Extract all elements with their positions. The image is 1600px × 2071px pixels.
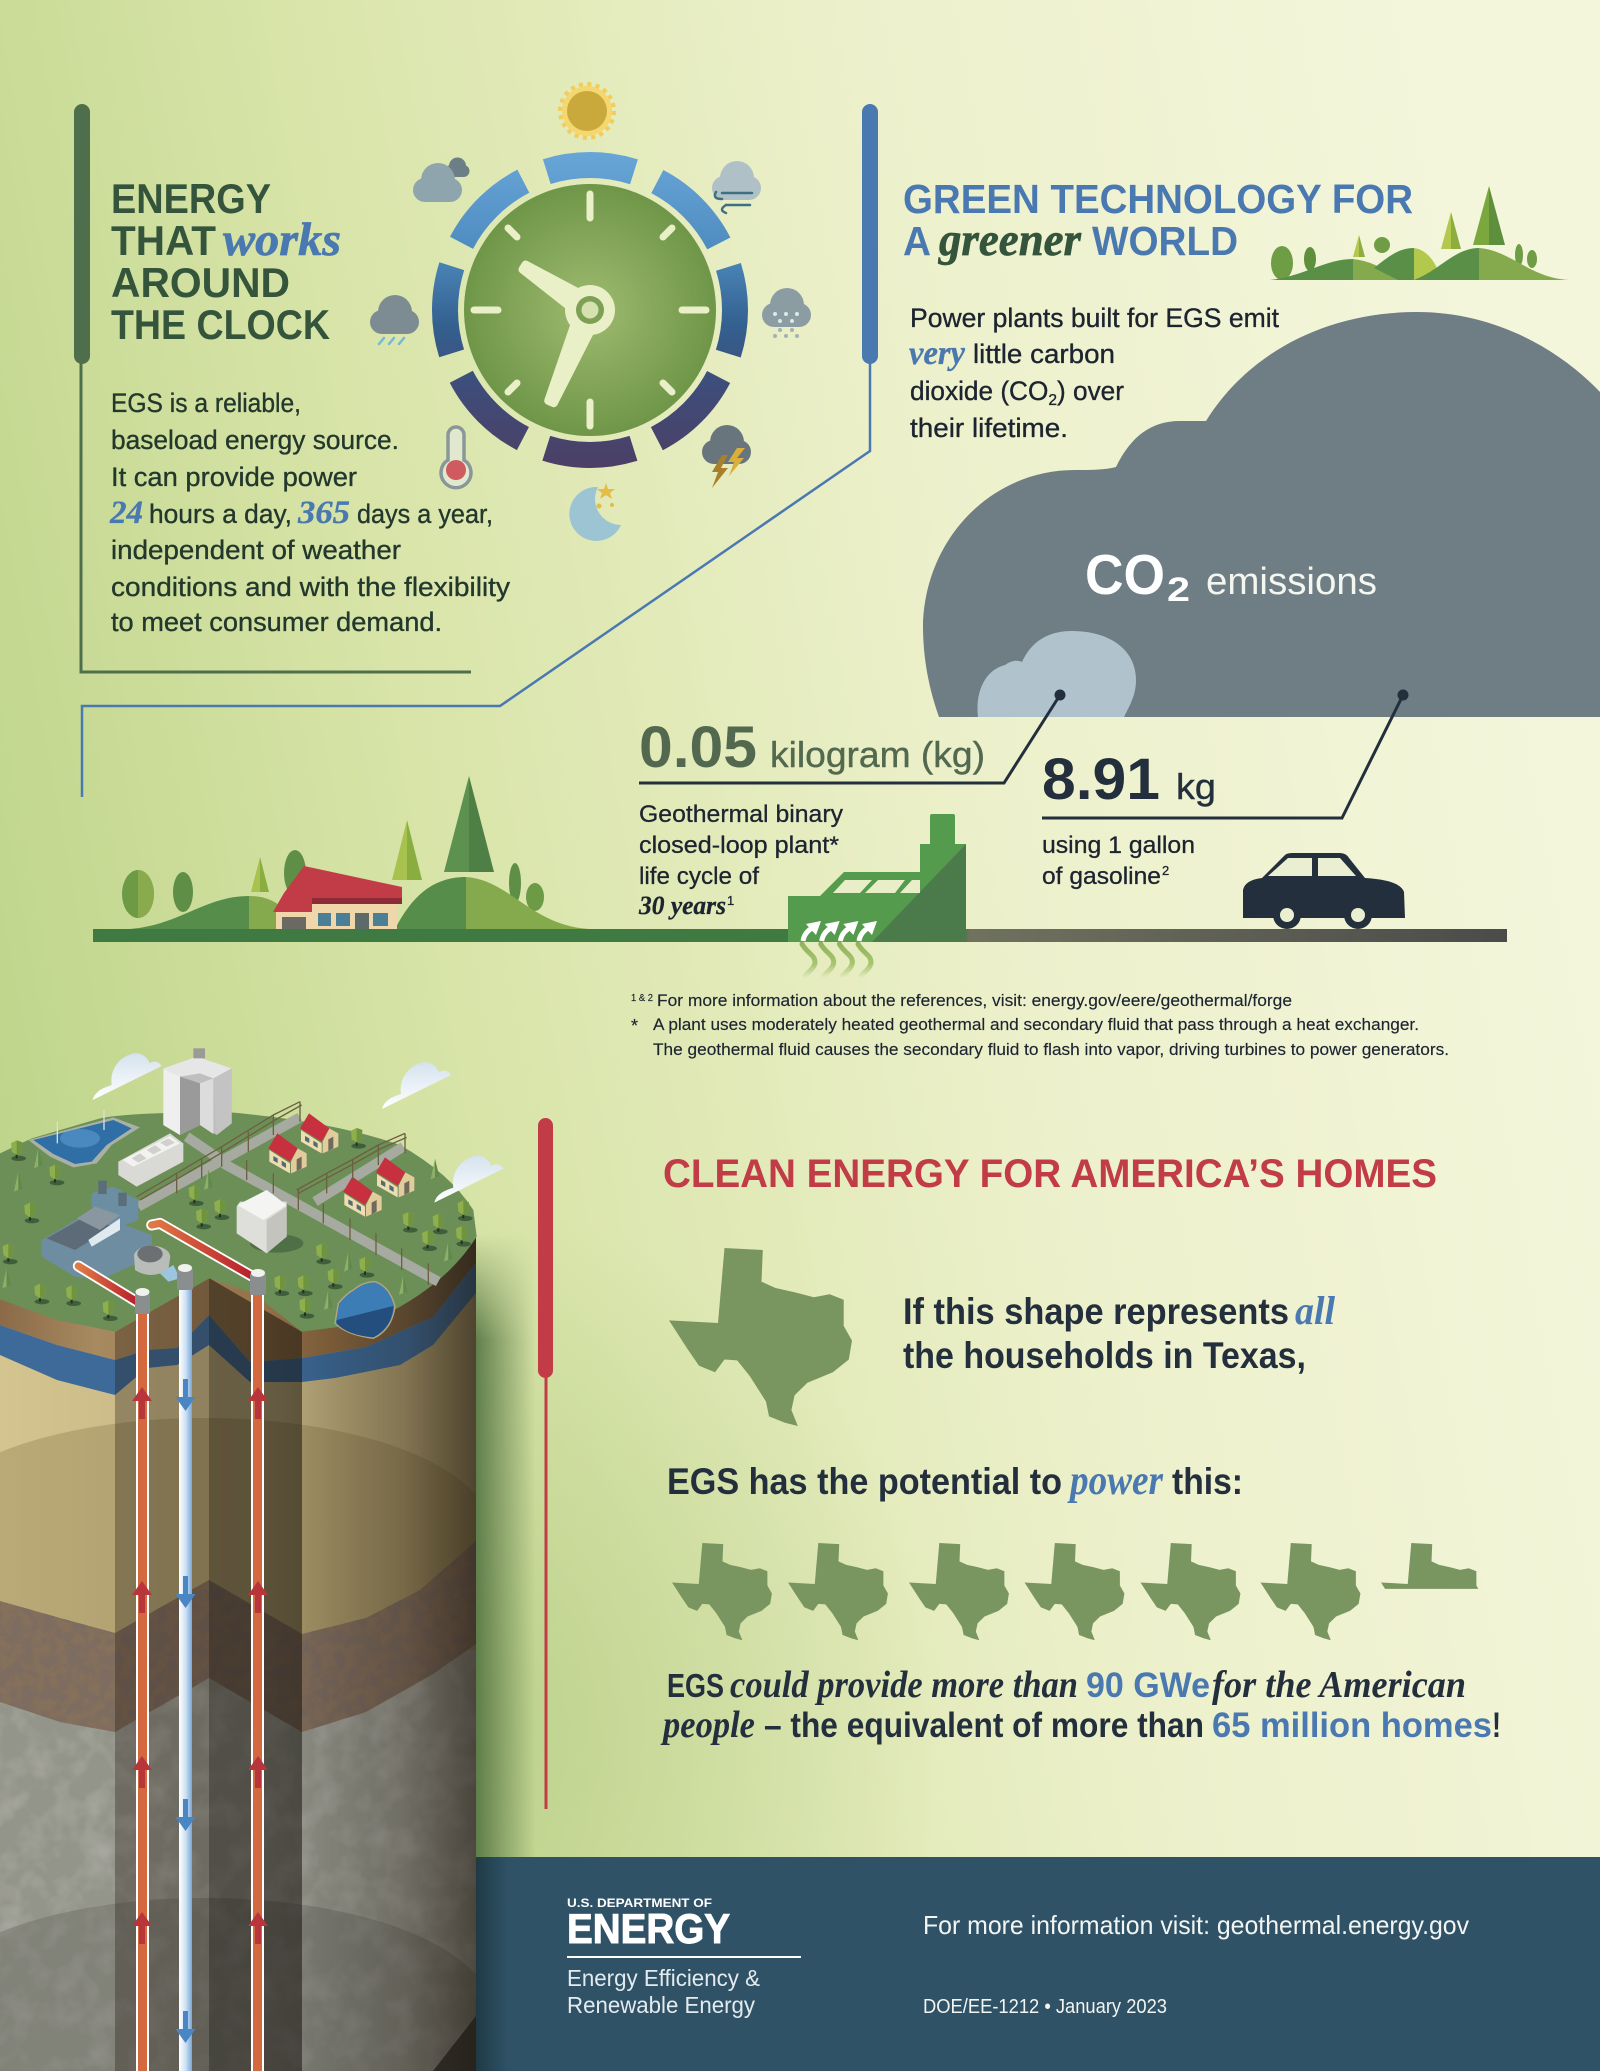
icon: moon and stars [569, 483, 621, 541]
callout: 0.05 kilogram: closed-loop plant* [639, 832, 839, 859]
footnotes: A plant uses moderately heated geothermal and secondary fluid that pass through a heat exchanger. [653, 1015, 1419, 1034]
heading: green technology: WORLD [1092, 218, 1238, 264]
panel: clean energy for America's homes [538, 1118, 1501, 1809]
roads [138, 1117, 438, 1282]
callout: 0.05 kilogram: Geothermal binary [639, 801, 843, 828]
icon: Texas large [669, 1248, 852, 1426]
text: 90 GWe and 65 million homes: 65 million homes [1212, 1706, 1492, 1745]
body text: very little carbon dioxide [909, 303, 1279, 443]
logo: U.S. Department of Energy: Energy Efficiency & [567, 1965, 760, 1991]
icon: heat arrows [802, 921, 877, 976]
sky clouds [93, 1053, 503, 1203]
body text: reliable baseload: to meet consumer demand. [111, 607, 442, 637]
footer [476, 1857, 1600, 2071]
callout: 8.91 kg [1042, 690, 1408, 890]
power lines [137, 1102, 428, 1285]
panel: green technology for a greener world [82, 104, 1600, 920]
icon: office tower [163, 1048, 232, 1135]
chart: CO2 emissions large cloud: emissions [1206, 561, 1377, 603]
heading: energy that works around the clock: works [223, 214, 341, 266]
text: EGS has the potential to power this: this: [1172, 1461, 1243, 1502]
chart: CO2 emissions large cloud [923, 312, 1600, 717]
trees [2, 1128, 473, 1321]
text: if this shape represents all: the households in Texas, [903, 1335, 1306, 1376]
heading: energy that works around the clock: THAT [111, 217, 216, 264]
body text: very little carbon dioxide: ) over [1057, 376, 1124, 406]
callout: 8.91 kg: using 1 gallon [1042, 832, 1195, 859]
callout: 8.91 kg: 2 [1162, 863, 1169, 878]
body text: reliable baseload: EGS is a reliable, [111, 388, 301, 418]
houses [268, 1113, 414, 1217]
icon: partly cloudy [413, 158, 470, 202]
logo: U.S. Department of Energy: U.S. DEPARTMENT OF [567, 1898, 712, 1910]
subsurface rock layers [0, 1237, 490, 2071]
body text: reliable baseload: It can provide power [111, 462, 357, 492]
heading: energy that works around the clock: THE CLOCK [111, 301, 330, 348]
body text: very little carbon dioxide: Power plants built for EGS emit [910, 303, 1279, 333]
callout: 8.91 kg: kg [1176, 766, 1216, 807]
text: EGS has the potential to power this [667, 1458, 1243, 1504]
heading: green technology: GREEN TECHNOLOGY FOR [903, 176, 1413, 222]
icon: separator tank [134, 1246, 180, 1282]
text: 90 GWe and 65 million homes: could provide more than [730, 1664, 1078, 1706]
icon: lower pond [335, 1282, 395, 1338]
icon: pond with wind turbines [28, 1110, 140, 1167]
text: if this shape represents all [903, 1288, 1336, 1376]
text: 90 GWe and 65 million homes: people [660, 1704, 755, 1746]
text: EGS has the potential to power this: power [1067, 1458, 1164, 1504]
callout: 8.91 kg: of gasoline [1042, 863, 1161, 890]
panel: energy that works around the clock [74, 85, 811, 672]
text: 90 GWe and 65 million homes [660, 1664, 1501, 1746]
body text: very little carbon dioxide: 2 [1048, 392, 1057, 409]
heading: energy that works around the clock: AROUND [111, 259, 290, 306]
illustration: landscape with house, plant and car [93, 776, 1507, 976]
icon: sun [561, 85, 613, 137]
text: 90 GWe and 65 million homes: EGS [667, 1667, 724, 1704]
cylinder drop shadow [476, 1235, 536, 1857]
body text: reliable baseload [109, 388, 511, 637]
hot pipes on surface [78, 1223, 252, 1302]
surface: grass, buildings, roads [0, 1048, 477, 1338]
grass disk [0, 1113, 477, 1332]
body text: very little carbon dioxide: their lifetime. [910, 413, 1068, 443]
red panel bar [538, 1118, 553, 1809]
body text: reliable baseload: hours a day, [149, 499, 292, 529]
callout: 0.05 kilogram: 0.05 [639, 715, 757, 780]
ground line [93, 929, 1507, 942]
callout: 0.05 kilogram [638, 690, 1066, 920]
icon: windy cloud [712, 161, 761, 213]
chart: CO2 emissions large cloud: CO [1085, 543, 1165, 607]
text: EGS has the potential to power this: EGS has the potential to [667, 1461, 1062, 1502]
text: 90 GWe and 65 million homes: – the equivalent of more than [764, 1706, 1204, 1745]
icon: storm cloud [702, 425, 751, 488]
callout: 8.91 kg: 8.91 [1042, 747, 1160, 812]
icon: left hills [130, 877, 589, 929]
body text: reliable baseload: 365 [297, 495, 350, 531]
blue panel bar and connector line [82, 104, 878, 797]
body text: very little carbon dioxide: very [909, 335, 966, 372]
icon: white block building [237, 1190, 303, 1253]
logo: U.S. Department of Energy: ENERGY [567, 1905, 730, 1952]
text: 90 GWe and 65 million homes: ! [1492, 1706, 1501, 1745]
icon: hills and trees [1270, 186, 1569, 280]
footnotes: The geothermal fluid causes the secondary fluid to flash into vapor, driving turbines to power generators. [653, 1040, 1449, 1059]
icon: snow cloud [762, 288, 811, 338]
heading: energy that works around the clock: ENERGY [111, 175, 271, 222]
icon: power plant [788, 814, 966, 942]
body text: reliable baseload: conditions and with the flexibility [111, 572, 511, 602]
icon: low white building [118, 1133, 183, 1187]
heading: energy that works around the clock [111, 175, 341, 348]
heading: green technology: greener [938, 214, 1082, 266]
illustration: EGS geothermal cutaway [0, 1048, 536, 2071]
body text: very little carbon dioxide: little carbon [973, 339, 1115, 369]
body text: reliable baseload: days a year, [357, 499, 493, 529]
body text: reliable baseload: baseload energy source. [111, 425, 399, 455]
heading: green technology: A [903, 218, 931, 264]
logo: U.S. Department of Energy [567, 1898, 801, 2018]
footnotes: * [631, 1016, 638, 1036]
body text: very little carbon dioxide: dioxide (CO [910, 376, 1053, 406]
footnotes: 1 & 2 [631, 993, 653, 1004]
icon: house [273, 866, 402, 929]
callout: 0.05 kilogram: 30 years [638, 891, 726, 920]
text: document number: DOE/EE-1212 • January 2023 [923, 1996, 1167, 2018]
text: if this shape represents all: all [1295, 1288, 1336, 1333]
wells: production and injection pipes [132, 1264, 268, 2071]
icon: trees [122, 776, 544, 918]
callout: 0.05 kilogram: life cycle of [639, 863, 759, 890]
footnotes [631, 991, 1449, 1059]
heading: clean energy: CLEAN ENERGY FOR AMERICA’S HOMES [663, 1152, 1437, 1196]
footnotes: For more information about the references, visit: energy.gov/eere/geothermal/forge [657, 991, 1292, 1010]
pictogram: six and a half Texas shapes [672, 1543, 1481, 1640]
clock [445, 165, 735, 455]
callout: 0.05 kilogram: kilogram (kg) [770, 734, 985, 775]
body text: reliable baseload: 24 [109, 495, 143, 531]
logo: U.S. Department of Energy: Renewable Energy [567, 1992, 755, 2018]
icon: thermometer [441, 427, 471, 488]
callout: 0.05 kilogram: 1 [727, 893, 734, 908]
green panel bar and bracket [74, 104, 471, 672]
icon: power plant building [42, 1181, 152, 1280]
text: 90 GWe and 65 million homes: for the American [1212, 1664, 1466, 1706]
heading: green technology [903, 176, 1413, 266]
text: if this shape represents all: If this shape represents [903, 1291, 1289, 1332]
body text: reliable baseload: independent of weather [111, 535, 401, 565]
icon: car [1243, 853, 1405, 929]
icon: rain cloud [370, 295, 419, 344]
chart: CO2 emissions large cloud: 2 [1167, 571, 1190, 609]
text: more information: For more information visit: geothermal.energy.gov [923, 1910, 1469, 1940]
text: 90 GWe and 65 million homes: 90 GWe [1086, 1666, 1210, 1705]
